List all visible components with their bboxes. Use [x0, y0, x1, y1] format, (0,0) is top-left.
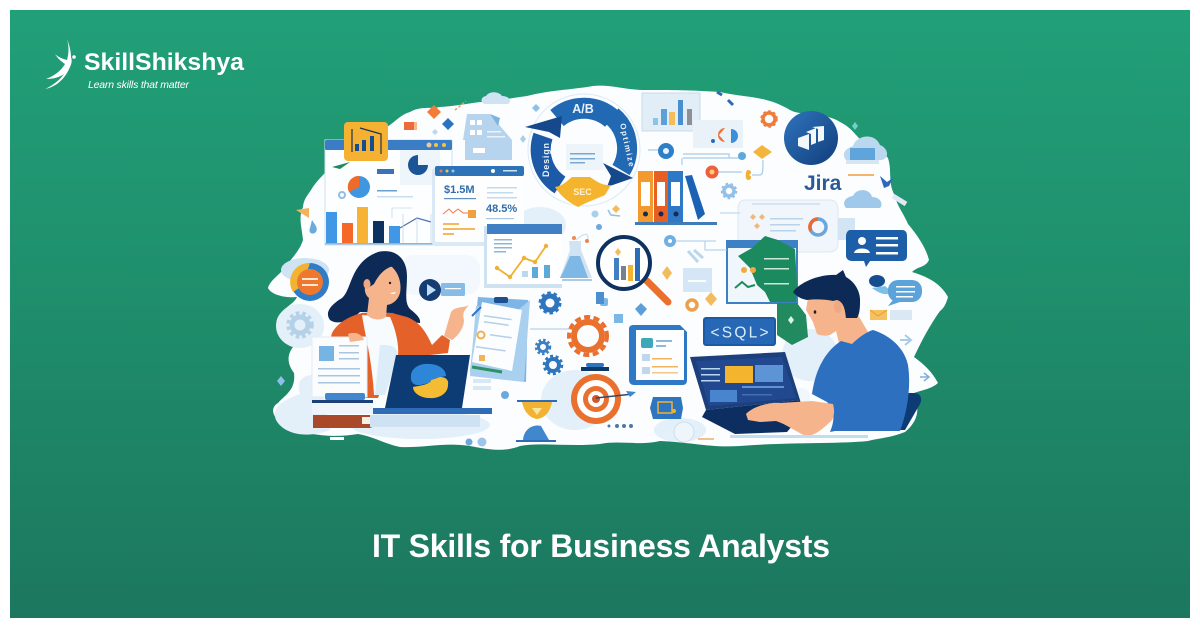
icon: binders on shelf — [635, 171, 717, 225]
eye — [814, 310, 816, 314]
cycle label: left stage: Design — [541, 143, 551, 177]
neck and face — [806, 297, 868, 347]
pointing hand — [444, 305, 469, 340]
title: IT Skills for Business Analysts — [372, 528, 830, 564]
small flag and bubble accents — [296, 208, 602, 234]
icon: orange donut chart — [281, 258, 329, 301]
books — [312, 393, 380, 428]
white cloud backdrop — [268, 86, 948, 450]
face — [365, 266, 401, 319]
icon: cloud with laptop — [844, 122, 906, 204]
icon: video play bubble — [419, 279, 465, 301]
navy donut chart — [400, 150, 440, 185]
icon: pale gear — [288, 313, 312, 337]
KPI value: $1.5M — [444, 184, 475, 196]
cycle label: SEC: SEC — [573, 187, 592, 197]
center document — [566, 144, 603, 170]
character: woman with python laptop — [312, 251, 492, 428]
ear — [834, 301, 842, 313]
icon: Jira logo — [784, 111, 842, 195]
decorative icons: diamonds and document — [404, 92, 540, 143]
panel: pacman chart card — [693, 92, 743, 148]
small decorative icons around magnifier — [600, 205, 727, 323]
illustration: business analyst skills collage — [268, 86, 948, 450]
icons: gears group — [501, 292, 607, 399]
icon: pale building document — [463, 114, 512, 160]
bottom small accents — [330, 422, 714, 442]
panel: clipboard — [470, 297, 530, 390]
icon: yellow analytics badge — [344, 122, 388, 161]
hand on document — [348, 333, 364, 342]
line chart — [400, 218, 431, 228]
desk line — [730, 435, 868, 438]
cycle label: right stage: Optimize — [618, 123, 636, 168]
cycle arrowhead: left — [525, 116, 562, 138]
pale blue haze patches — [275, 207, 838, 442]
icon: pale blue gear — [722, 184, 736, 198]
icon: hourglass and globe — [466, 400, 557, 446]
flow connector nodes — [648, 143, 772, 180]
panel: user profile chat card — [846, 230, 907, 267]
ear — [364, 279, 370, 289]
panel: speech bubble with pie — [720, 200, 855, 266]
panel: dashboard window with bar chart — [325, 140, 452, 245]
chair — [867, 393, 921, 430]
icon: target with arrow — [571, 363, 636, 424]
cycle label: A/B: A/B — [572, 102, 594, 116]
left document — [312, 337, 367, 397]
SQL text: <SQL> — [710, 324, 768, 342]
logo tagline: Learn skills that matter — [88, 79, 190, 91]
icon: small chip — [650, 397, 683, 419]
icon: chat and mail accents — [869, 275, 929, 381]
laptop — [690, 352, 803, 434]
cycle segment: SEC — [555, 177, 611, 207]
icon: SQL badge — [703, 317, 776, 346]
panel: green code window and map — [727, 236, 808, 345]
icon: flask — [560, 234, 592, 281]
icon: document card — [629, 325, 687, 385]
hair — [328, 251, 420, 323]
shirt — [812, 330, 909, 432]
logo wordmark: SkillShikshya — [84, 49, 244, 76]
cycle arc: right — [612, 116, 627, 170]
icon: pale cloud — [844, 190, 882, 208]
cycle arc: left — [541, 136, 560, 185]
icon: orange gear — [762, 112, 776, 126]
shirt shading — [375, 345, 398, 395]
fringe — [366, 261, 396, 288]
cardigan — [331, 313, 450, 398]
KPI percentage: 48.5% — [486, 203, 517, 215]
hair — [793, 270, 860, 318]
panel: trend chart window — [484, 224, 562, 288]
bar chart — [325, 207, 437, 244]
pie chart — [348, 176, 370, 198]
arm and hand — [746, 401, 834, 436]
white shirt — [362, 315, 398, 395]
laptop — [370, 355, 492, 427]
panel: KPI window with $1.5M and 48.5% — [432, 166, 524, 246]
logo: SkillShikshya — [45, 39, 244, 91]
panel: small bar chart card — [642, 93, 700, 131]
eye and smile — [389, 282, 396, 294]
window title bar — [325, 140, 452, 150]
Jira label: Jira — [804, 172, 842, 195]
cycle arc: A/B — [557, 108, 612, 119]
python logo — [411, 364, 446, 385]
character: man with SQL laptop — [690, 270, 921, 438]
cycle arrowhead: right — [603, 163, 633, 187]
small dots — [608, 424, 633, 428]
panel: cycle diagram A/B SEC — [525, 94, 640, 207]
icon: magnifying glass — [598, 237, 668, 302]
icon: leaping figure swoosh — [45, 39, 76, 89]
